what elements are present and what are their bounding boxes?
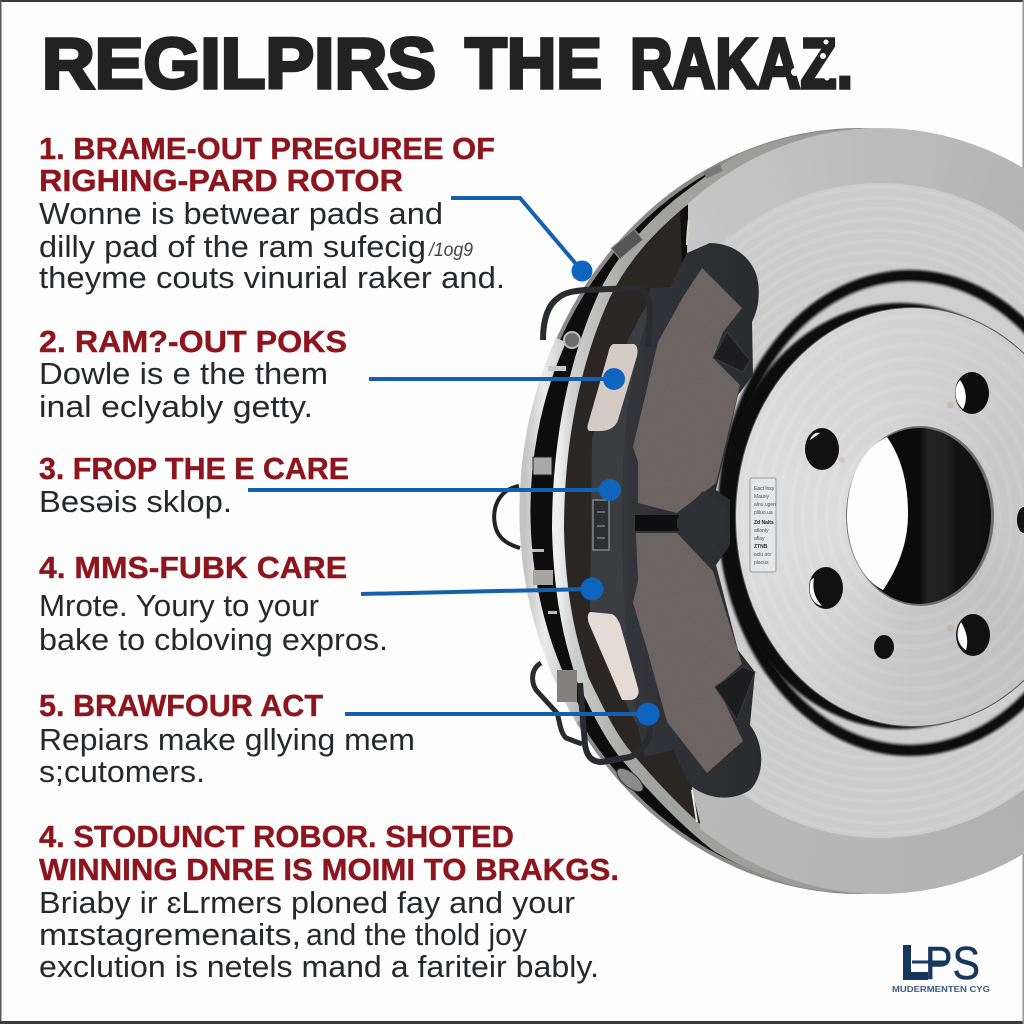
brake disc illustration [494,128,1024,894]
inner silver rim band [558,128,860,892]
section 5 text [39,688,415,789]
caliper window [593,500,609,550]
logo [892,937,990,994]
lower friction pad [633,533,743,773]
logo: PS [925,937,980,989]
dark rotor interior [558,203,700,830]
specification label: alnu.ugen [754,502,776,508]
upper friction pad [633,268,742,513]
section 6 text: mɪstagremenaits, [39,917,301,952]
specification label: Mauny [754,494,770,500]
inner brushed ring [716,183,1024,838]
face corner highlights [687,220,697,822]
specification label [750,478,776,572]
section 3 text: Besəis sklop. [39,484,232,519]
section 4 text: Mrote. Youry to your [39,588,319,623]
hub face [735,307,1024,727]
title distress marks [791,40,830,80]
specification label: aclu atv [754,552,772,558]
section 4 text: bake to cbloving expros. [39,622,388,657]
outer brushed ring [687,128,1024,894]
title: THE [465,25,602,104]
leader line 3 [248,479,621,501]
upper shim pad [587,344,638,431]
leader line 5 [345,702,660,726]
section 5 text: Repiars make gllying mem [39,722,415,757]
specification label: Zd Nalts [754,520,774,526]
specification label: atlonly [754,528,769,534]
section 1 text: dilly pad of the ram sufecig [39,229,426,264]
section 6 text: Briaby ir ɛLrmers ploned fay and your [39,885,575,920]
title: RAKAZ. [630,25,853,104]
side wire loop [494,486,520,548]
upper tab [713,332,750,372]
section 6 text: WINNING DNRE IS MOIMI TO BRAKGS. [39,852,619,887]
rotor outer body [530,128,874,894]
leader line 1 [451,198,592,282]
outer silver rim band [525,340,581,720]
caliper bracket [590,306,647,726]
hub groove [719,276,1024,750]
lower wire loop [533,663,582,744]
section 6 text: and the thold joy [306,917,527,952]
section 2 text [39,324,347,424]
title: REGILPIRS [42,25,436,104]
backing plate [622,243,761,798]
section 5 text: 5. BRAWFOUR ACT [39,688,323,723]
logo: MUDERMENTEN CYG [892,985,990,994]
section 2 text: Dowle is e the them [39,356,328,391]
leader line 2 [369,368,625,390]
section 2 text: inal eclyably getty. [39,389,313,424]
section 6 text: exclution is netels mand a fariteir bably. [39,949,599,984]
section 2 text: 2. RAM?-OUT POKS [39,324,347,359]
lower tab [715,667,755,720]
section 1 text: theyme couts vinurial raker and. [39,260,505,295]
section 4 text [39,550,388,657]
bolt holes [805,372,1024,659]
section 6 text [39,819,619,984]
pad slit [635,515,679,531]
centre bore [846,426,994,606]
specification label: ZTNB [754,544,768,550]
upper wire clip [543,288,650,347]
rotor friction face [687,128,1024,894]
section 6 text: 4. STODUNCT ROBOR. SHOTED [39,819,514,854]
leader line 4 [361,578,604,600]
section 3 text: 3. FROP THE E CARE [39,451,349,486]
title [42,25,853,104]
lower shim pad [588,612,639,700]
surface marks [839,402,954,632]
section 1 text: 1. BRAME-OUT PREGUREE OF [39,131,495,166]
centre spring clip [677,491,704,529]
specification label: aflay [754,536,765,542]
specification label: Eact lnsy [754,486,775,492]
specification label: placus [754,560,769,566]
section 1 text: /1og9 [427,240,473,261]
section 1 text [39,131,505,295]
section 3 text [39,451,349,519]
rim hardware [532,164,723,796]
section 1 text: Wonne is betwear pads and [39,196,443,231]
lower wire clip [580,683,650,762]
section 5 text: s;cutomers. [39,754,205,789]
specification label: pliluo.ua [754,510,773,516]
section 1 text: RIGHING-PARD ROTOR [39,163,403,198]
section 4 text: 4. MMS-FUBK CARE [39,550,347,585]
